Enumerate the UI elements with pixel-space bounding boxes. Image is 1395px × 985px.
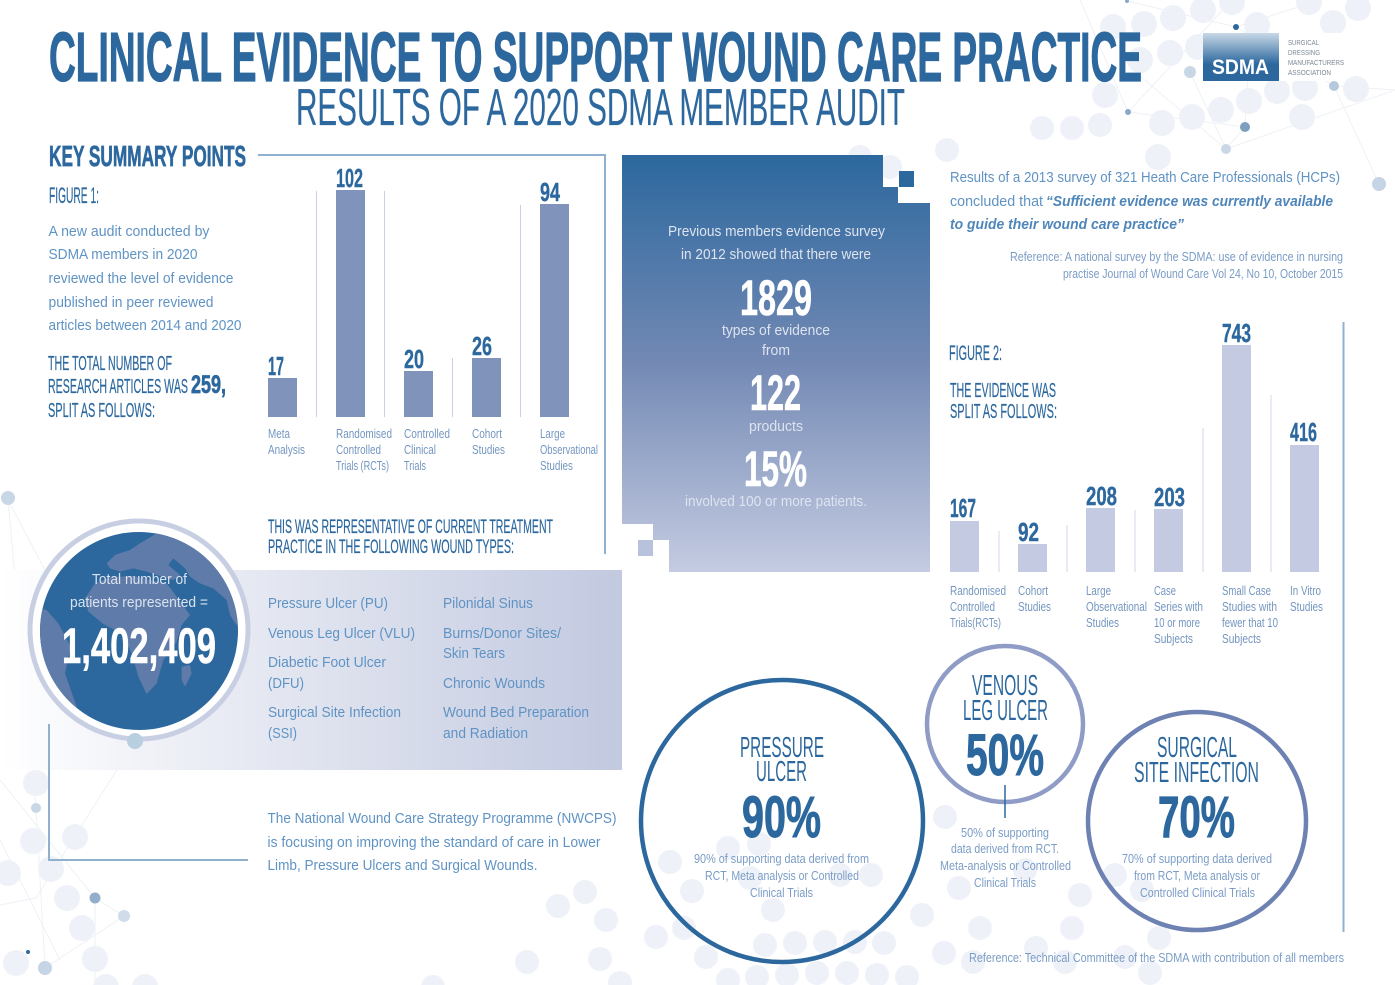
bar chart: figure 2: Studies [1290,599,1323,614]
panel: wound types band: Pressure Ulcer (PU) [268,595,388,612]
text: NWCPS programme: Limb, Pressure Ulcers and Surgical Wounds. [268,857,538,874]
bar chart: figure 1: Trials [404,458,426,473]
bar chart: figure 1: Studies [472,442,505,457]
text: 2013 survey results: to guide their wound care practice” [950,216,1184,233]
subtitle: RESULTS OF A 2020 SDMA MEMBER AUDIT [296,79,905,137]
panel: 2012 survey: 1829 [740,270,812,326]
panel: wound types band: Diabetic Foot Ulcer [268,654,386,671]
heading: wound types: THIS WAS REPRESENTATIVE OF CURRENT TREATMENT [268,517,553,538]
bar chart: figure 1: Controlled [404,426,450,441]
figure 1 intro text: FIGURE 1: [49,183,99,208]
total research articles statement: 259, [191,371,226,399]
panel: 2012 survey: in 2012 showed that there were [681,246,871,263]
bar chart: figure 1: 20 [404,344,424,374]
bar chart: figure 2: 743 [1222,318,1251,348]
bar chart: figure 2: 92 [1018,517,1039,547]
logo: SDMA: SURGICAL [1288,40,1319,47]
bar chart: figure 2: 203 [1154,482,1185,512]
circle: venous leg ulcer: Meta-analysis or Controlled [940,859,1071,873]
bar chart: figure 2: Subjects [1222,631,1261,646]
text: NWCPS programme [268,810,616,874]
logo: SDMA: ASSOCIATION [1288,70,1331,77]
bar chart: figure 2: Studies with [1222,599,1277,614]
globe: total patients [30,521,248,749]
figure 2 intro text: THE EVIDENCE WAS [950,380,1056,402]
bar chart: figure 1: Analysis [268,442,305,457]
logo: SDMA: DRESSING [1288,50,1320,57]
figure 1 intro text: articles between 2014 and 2020 [48,317,242,334]
heading: key summary points: KEY SUMMARY POINTS [49,141,246,173]
figure 2 intro text: FIGURE 2: [949,342,1002,365]
circle: surgical site infection: 70% [1158,785,1235,850]
bar chart: figure 2: Trials(RCTs) [950,615,1001,630]
total research articles statement: RESEARCH ARTICLES WAS [48,376,188,398]
total research articles statement: THE TOTAL NUMBER OF [48,353,172,375]
text: NWCPS programme: is focusing on improving the standard of care in Lower [268,834,600,851]
bar chart: figure 1: 102 [336,163,363,193]
globe: total patients: patients represented = [70,594,208,611]
bar chart: figure 2: Case [1154,583,1176,598]
circle: pressure ulcer [641,680,923,962]
figure 1 intro text: SDMA members in 2020 [48,246,198,263]
text: 2013 survey results: practise Journal of Wound Care Vol 24, No 10, October 2015 [1063,267,1343,281]
figure 1 intro text: published in peer reviewed [48,294,214,311]
bar chart: figure 2: Large [1086,583,1111,598]
bar chart: figure 2 [950,318,1323,646]
circle: pressure ulcer: Clinical Trials [750,886,813,900]
panel: wound types band [0,570,622,770]
logo: SDMA: SDMA [1212,56,1269,79]
globe: total patients: Total number of [92,571,188,588]
bar chart: figure 1: Trials (RCTs) [336,458,389,473]
circle: pressure ulcer: PRESSURE [740,732,824,764]
bar chart: figure 2: fewer that 10 [1222,615,1278,630]
circle: venous leg ulcer: VENOUS [972,670,1038,702]
text: 2013 survey results [950,169,1343,281]
panel: wound types band: Venous Leg Ulcer (VLU) [268,625,415,642]
logo: SDMA [1203,33,1345,81]
panel: 2012 survey: involved 100 or more patients. [685,493,867,510]
bar chart: figure 2: Randomised [950,583,1006,598]
bar chart: figure 1 [268,163,598,473]
frame line: lower left [49,724,248,860]
circle: pressure ulcer: ULCER [756,756,807,788]
total research articles statement: SPLIT AS FOLLOWS: [48,400,155,422]
globe: total patients: 1,402,409 [62,618,216,674]
bar chart: figure 1: Large [540,426,565,441]
bar chart: figure 2: Observational [1086,599,1147,614]
bar chart: figure 1: Meta [268,426,291,441]
circle: venous leg ulcer [927,646,1083,890]
bar chart: figure 2: Small Case [1222,583,1271,598]
panel: wound types band: (DFU) [268,675,304,692]
circle: surgical site infection: SITE INFECTION [1134,757,1259,789]
circle: surgical site infection [1088,712,1306,930]
bar chart: figure 1: 26 [472,331,492,361]
heading: wound types [268,517,553,558]
circle: venous leg ulcer: Clinical Trials [974,876,1036,890]
bar chart: figure 2: Studies [1086,615,1119,630]
continents [40,534,238,708]
heading: wound types: PRACTICE IN THE FOLLOWING WOUND TYPES: [268,537,514,558]
text: 2013 survey results: concluded that [950,193,1044,210]
figure 2 intro text: SPLIT AS FOLLOWS: [950,401,1057,423]
panel: wound types band: Surgical Site Infection [268,704,401,721]
panel: 2012 survey: 122 [750,365,801,421]
bar chart: figure 1: Clinical [404,442,436,457]
bar chart: figure 1: Randomised [336,426,392,441]
panel: 2012 survey: types of evidence [722,322,830,339]
bar chart: figure 2: 416 [1290,417,1317,447]
bar chart: figure 1: Cohort [472,426,502,441]
panel: wound types band: (SSI) [268,725,297,742]
frame line around figure 1 [258,155,605,554]
bar chart: figure 2: 208 [1086,481,1117,511]
bar chart: figure 1: Studies [540,458,573,473]
circle: surgical site infection: SURGICAL [1157,732,1237,764]
text: 2013 survey results: Reference: A national survey by the SDMA: use of evidence in nursing [1010,250,1343,264]
circle: venous leg ulcer: 50% of supporting [961,826,1049,840]
text: NWCPS programme: The National Wound Care Strategy Programme (NWCPS) [268,810,616,827]
bar chart: figure 2: Series with [1154,599,1203,614]
panel: wound types band: and Radiation [443,725,528,742]
circle: surgical site infection: from RCT, Meta analysis or [1134,869,1260,883]
bar chart: figure 2: Studies [1018,599,1051,614]
total research articles statement [48,353,226,422]
text: 2013 survey results: Results of a 2013 survey of 321 Heath Care Professionals (HCPs) [950,169,1340,186]
circle: venous leg ulcer: 50% [966,723,1044,788]
bar chart: figure 2: Subjects [1154,631,1193,646]
circle: venous leg ulcer: LEG ULCER [963,695,1048,727]
figure 1 intro text: A new audit conducted by [48,223,210,240]
circle: pressure ulcer: RCT, Meta analysis or Controlled [705,869,859,883]
bar chart: figure 1: 17 [268,351,284,381]
bar chart: figure 2: Controlled [950,599,995,614]
panel: 2012 survey: 15% [744,441,807,497]
bar chart: figure 2: Cohort [1018,583,1048,598]
panel: 2012 survey [622,155,930,572]
bar chart: figure 1: 94 [540,177,560,207]
panel: wound types band: Wound Bed Preparation [443,704,589,721]
bar chart: figure 2: In Vitro [1290,583,1321,598]
reference footer: Reference: Technical Committee of the SDMA with contribution of all members [969,951,1344,965]
figure 2 intro text [949,342,1057,423]
frame line: right [1342,322,1344,932]
panel: wound types band: Chronic Wounds [443,675,545,692]
panel: 2012 survey: products [749,418,803,435]
bar chart: figure 1: Controlled [336,442,381,457]
figure 1 intro text: reviewed the level of evidence [48,270,234,287]
logo: SDMA: MANUFACTURERS [1288,60,1344,67]
bar chart: figure 2: 10 or more [1154,615,1200,630]
panel: 2012 survey: Previous members evidence survey [668,223,885,240]
panel: 2012 survey: from [762,342,790,359]
circle: venous leg ulcer: data derived from RCT. [951,842,1059,856]
text: 2013 survey results: “Sufficient evidence was currently available [1046,193,1333,210]
bar chart: figure 2: 167 [950,493,976,523]
circle: surgical site infection: 70% of supporting data derived [1122,852,1272,866]
bar chart: figure 1: Observational [540,442,598,457]
circle: surgical site infection: Controlled Clinical Trials [1140,886,1255,900]
panel: wound types band: Burns/Donor Sites/ [443,625,562,642]
panel: wound types band: Skin Tears [443,645,505,662]
circle: pressure ulcer: 90% [742,785,821,850]
figure 1 intro text [48,183,242,334]
panel: wound types band: Pilonidal Sinus [443,595,533,612]
circle: pressure ulcer: 90% of supporting data derived from [694,852,869,866]
